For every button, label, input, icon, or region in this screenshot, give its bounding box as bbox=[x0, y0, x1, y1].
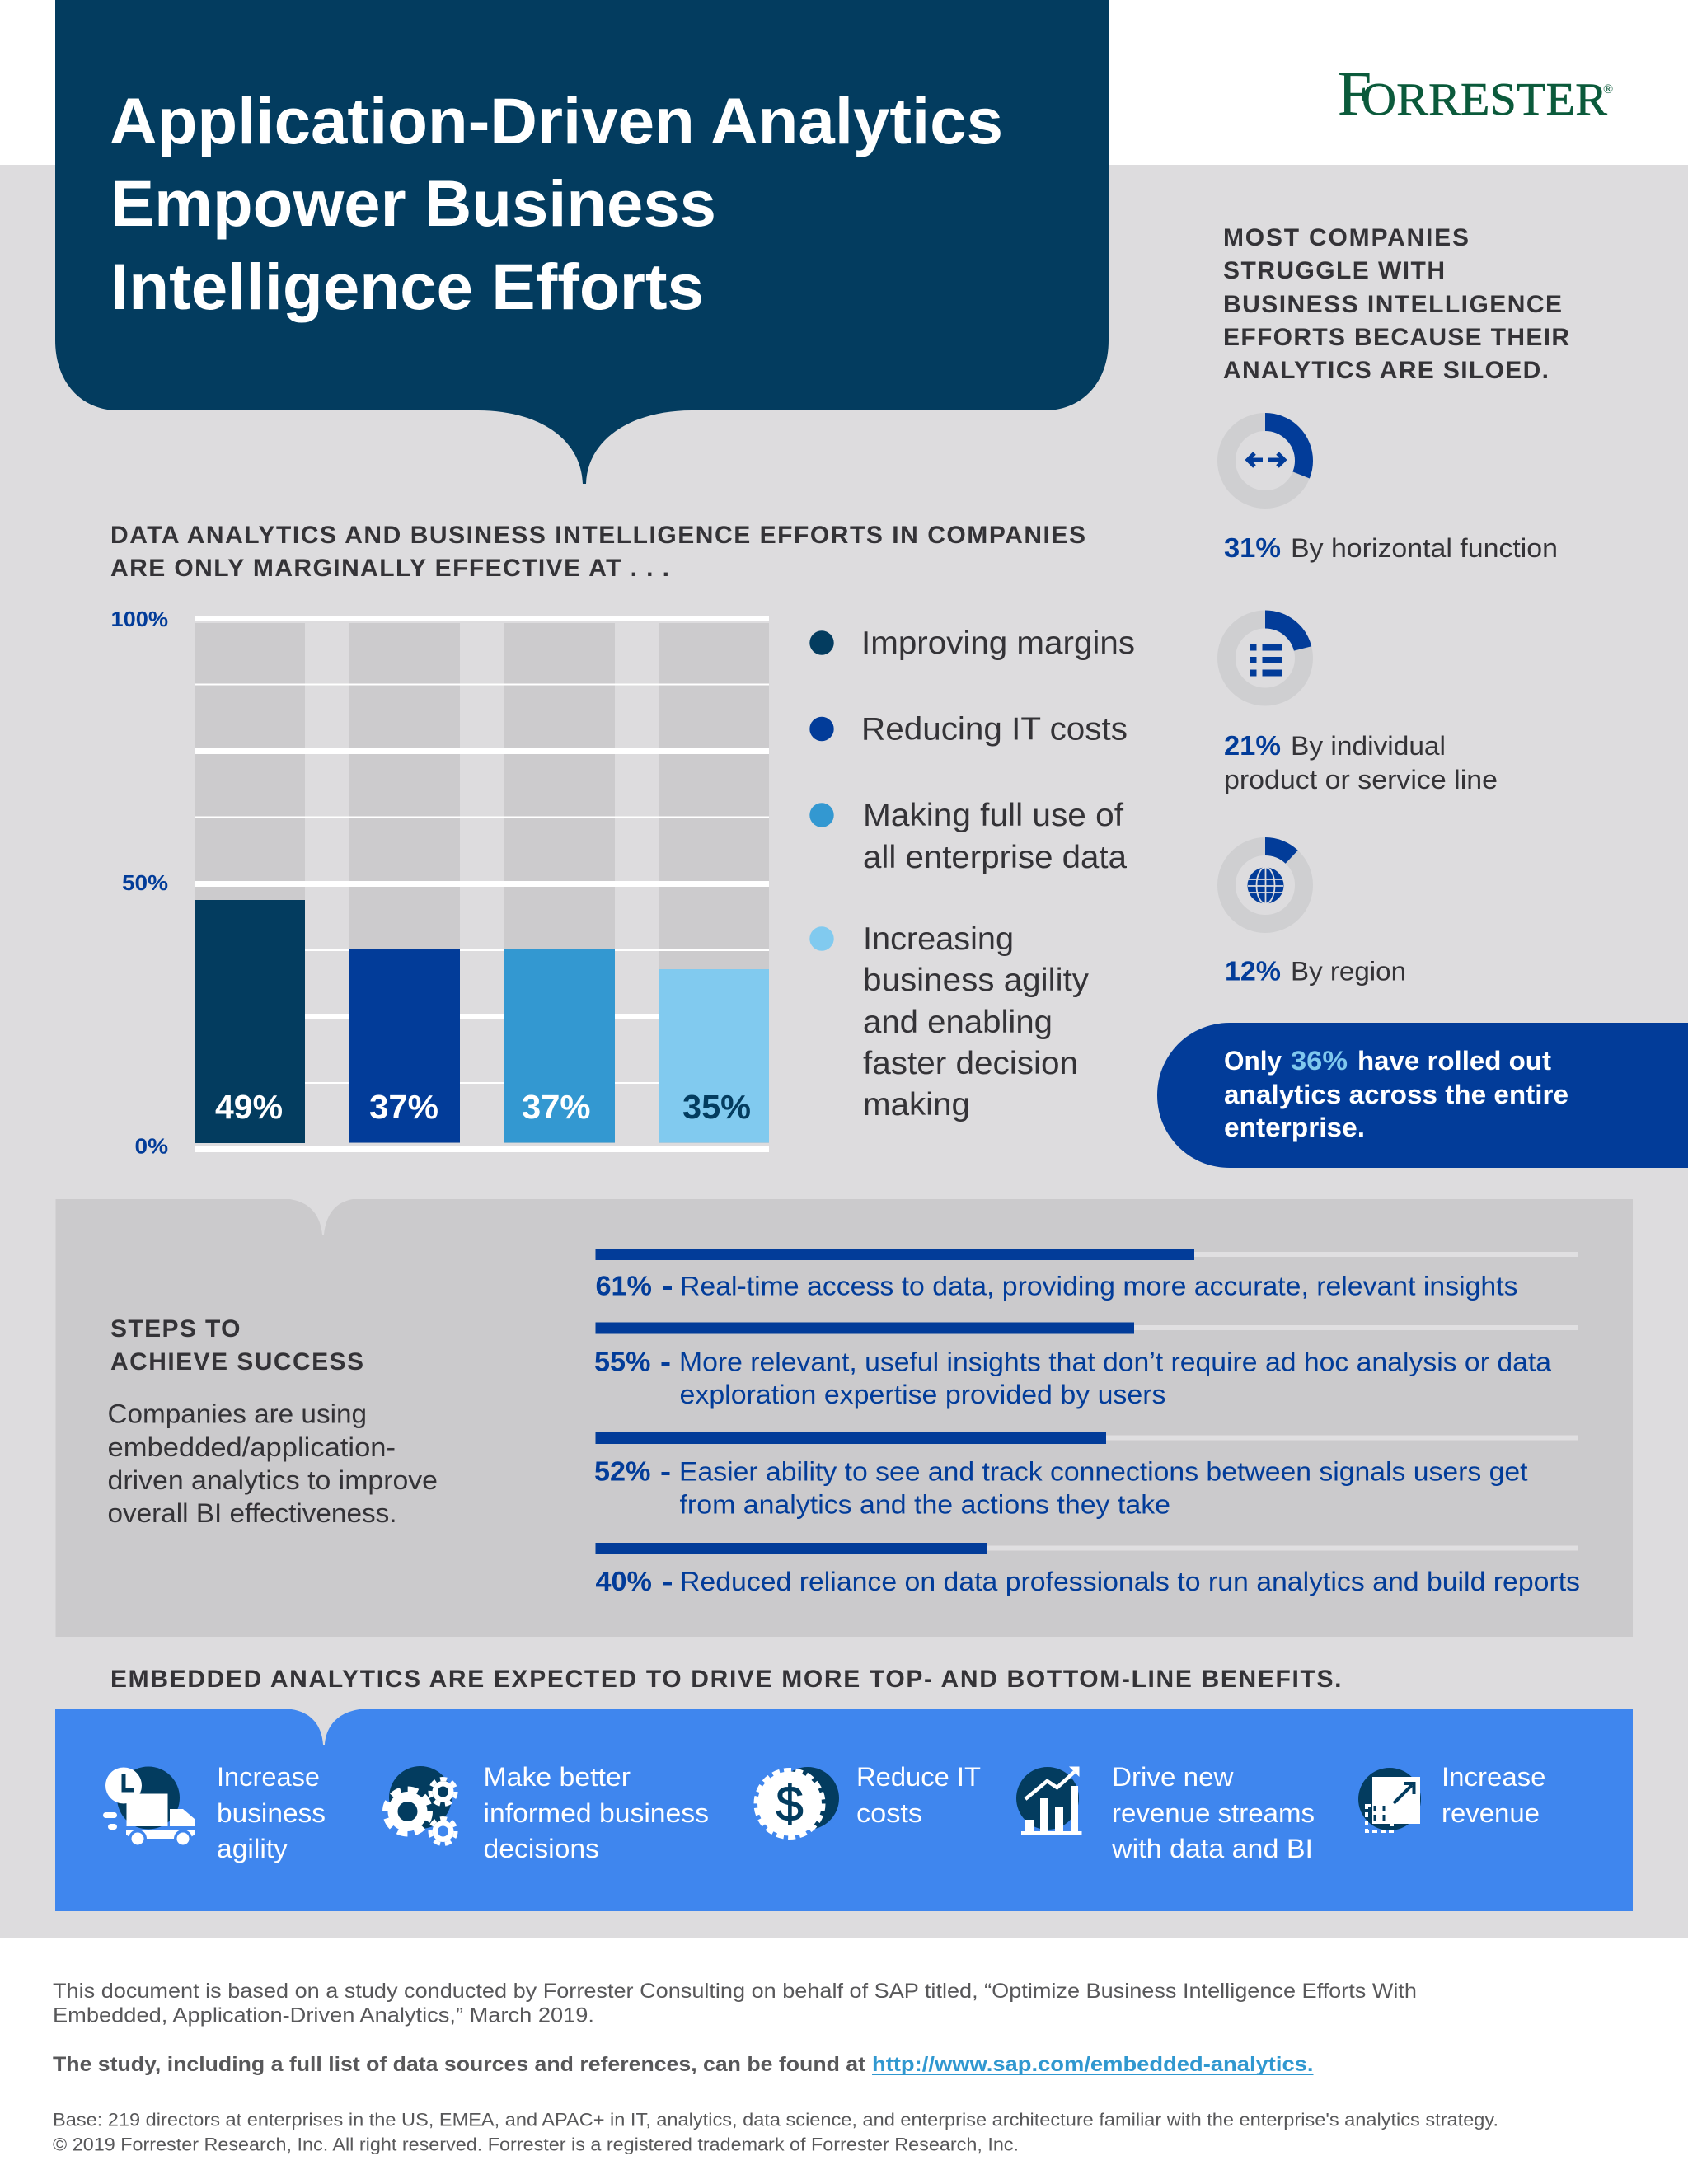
text: reduce IT costs: costs bbox=[856, 1798, 922, 1828]
title: Empower Business bbox=[110, 166, 716, 240]
text: increase business agility: Increase bbox=[217, 1762, 320, 1792]
chart legend bbox=[809, 626, 1135, 1122]
footer: base and copyright bbox=[53, 2110, 1498, 2154]
axis labels: 50% bbox=[122, 870, 168, 895]
text: make better decisions: informed business bbox=[483, 1798, 709, 1828]
footer: study source: This document is based on a study conducted by Forrester Consulting on behalf of SAP titled, “Optimize Business Intelligence Efforts With bbox=[53, 1980, 1417, 2003]
heading: steps to achieve success: ACHIEVE SUCCESS bbox=[110, 1348, 363, 1376]
text: increase business agility: business bbox=[217, 1798, 326, 1828]
callout: only 36% bbox=[1157, 1023, 1688, 1168]
stat bar: 52%: Easier ability to see and track connections between signals users get bbox=[679, 1457, 1528, 1487]
title: Intelligence Efforts bbox=[110, 250, 704, 323]
stat bar: 52%: 52% bbox=[594, 1455, 651, 1487]
text: steps description bbox=[107, 1399, 438, 1528]
stat bar: 55%: More relevant, useful insights that don’t require ad hoc analysis or data bbox=[679, 1347, 1551, 1376]
stat: 21% bbox=[1224, 730, 1498, 794]
stat: 12%: 12% bbox=[1225, 956, 1281, 986]
stat bar: 52% bbox=[594, 1432, 1578, 1520]
stat: 31%: 31% bbox=[1224, 532, 1281, 563]
heading: steps to achieve success: STEPS TO bbox=[110, 1315, 241, 1343]
axis labels bbox=[110, 607, 168, 1159]
stat bar: 61%: Real-time access to data, providing more accurate, relevant insights bbox=[680, 1271, 1518, 1301]
donut: 21% by product or service line bbox=[1226, 620, 1304, 697]
text: reduce IT costs: Reduce IT bbox=[856, 1762, 981, 1792]
stat bar: 61% bbox=[595, 1249, 1578, 1301]
bar: improving margins 49%: 49% bbox=[215, 1088, 283, 1126]
text: increase business agility bbox=[217, 1762, 326, 1863]
heading: siloed analytics: EFFORTS BECAUSE THEIR bbox=[1223, 324, 1569, 351]
bar: improving margins 49% bbox=[195, 900, 305, 1143]
text: drive new revenue: with data and BI bbox=[1111, 1834, 1313, 1863]
axis labels: 0% bbox=[135, 1134, 168, 1159]
donut: 12% by region bbox=[1226, 846, 1304, 924]
text: steps description: driven analytics to improve bbox=[107, 1465, 438, 1495]
bar: business agility 35%: 35% bbox=[682, 1088, 751, 1126]
footer: study source bbox=[53, 1980, 1417, 2027]
title banner bbox=[55, 0, 1109, 484]
stat: 21%: 21% bbox=[1224, 730, 1281, 761]
heading: siloed analytics: ANALYTICS ARE SILOED. bbox=[1223, 357, 1549, 384]
text: increase revenue bbox=[1442, 1762, 1546, 1828]
legend: business agility: making bbox=[863, 1087, 970, 1122]
legend: reducing IT costs: Reducing IT costs bbox=[861, 712, 1128, 747]
bar: enterprise data 37% bbox=[504, 949, 615, 1142]
stat bar: 52%: from analytics and the actions they take bbox=[679, 1490, 1170, 1520]
legend: full use of data bbox=[809, 798, 1127, 875]
icon: globe bbox=[1248, 867, 1284, 904]
stat bar: 55%: exploration expertise provided by users bbox=[679, 1380, 1165, 1409]
heading: embedded analytics benefits: EMBEDDED ANALYTICS ARE EXPECTED TO DRIVE MORE TOP- AND BOTTOM-LINE BENEFITS. bbox=[110, 1666, 1341, 1693]
heading: siloed analytics: STRUGGLE WITH bbox=[1223, 257, 1445, 284]
footer: study link bbox=[53, 2053, 1314, 2076]
text: drive new revenue: revenue streams bbox=[1112, 1798, 1315, 1828]
legend: business agility: Increasing bbox=[863, 921, 1014, 957]
footer: study link: The study, including a full list of data sources and references, can be found at bbox=[53, 2053, 866, 2076]
footer: base and copyright: Base: 219 directors at enterprises in the US, EMEA, and APAC+ in IT, analytics, data science, and enterprise architecture familiar with the enterprise's analytics strategy. bbox=[53, 2110, 1498, 2130]
text: steps description: Companies are using bbox=[107, 1399, 367, 1429]
legend: improving margins: Improving margins bbox=[861, 626, 1135, 661]
logo: Forrester bbox=[1338, 58, 1613, 129]
heading: steps to achieve success bbox=[110, 1315, 363, 1376]
heading: marginally effective bbox=[110, 522, 1085, 582]
bar tracks bbox=[195, 623, 769, 1143]
bar: reducing IT costs 37%: 37% bbox=[369, 1088, 438, 1126]
text: drive new revenue bbox=[1111, 1762, 1315, 1863]
legend: business agility: and enabling bbox=[863, 1005, 1053, 1040]
legend: full use of data: Making full use of bbox=[863, 798, 1123, 833]
icon: gears bbox=[386, 1766, 456, 1844]
title bbox=[110, 84, 1003, 323]
stat bar: 55% bbox=[594, 1322, 1578, 1409]
heading: siloed analytics: BUSINESS INTELLIGENCE bbox=[1223, 291, 1562, 318]
text: reduce IT costs bbox=[856, 1762, 981, 1828]
text: make better decisions: decisions bbox=[483, 1834, 599, 1863]
stat: 12% bbox=[1225, 956, 1406, 986]
stat: 21%: product or service line bbox=[1224, 765, 1498, 794]
stat: 31%: By horizontal function bbox=[1291, 533, 1558, 563]
heading: marginally effective: DATA ANALYTICS AND BUSINESS INTELLIGENCE EFFORTS IN COMPANIES bbox=[110, 522, 1085, 549]
logo: Forrester: F bbox=[1338, 58, 1372, 129]
callout: only 36%: enterprise. bbox=[1224, 1113, 1365, 1142]
icon: arrows bbox=[1248, 453, 1284, 466]
bar: reducing IT costs 37% bbox=[349, 949, 460, 1142]
text: increase revenue: Increase bbox=[1442, 1762, 1546, 1792]
icon: dollar badge: $ bbox=[776, 1776, 804, 1831]
donut: 31% by horizontal function bbox=[1226, 422, 1304, 499]
heading: siloed analytics: MOST COMPANIES bbox=[1223, 224, 1469, 251]
text: steps description: overall BI effectiveness. bbox=[107, 1498, 397, 1528]
icon: truck and clock bbox=[103, 1767, 195, 1848]
text: steps description: embedded/application- bbox=[107, 1432, 396, 1462]
text: increase business agility: agility bbox=[217, 1834, 288, 1863]
callout: only 36%: 36% bbox=[1291, 1046, 1348, 1076]
stat: 12%: By region bbox=[1291, 956, 1406, 986]
footer: base and copyright: © 2019 Forrester Research, Inc. All right reserved. Forrester is a registered trademark of Forrester Research, Inc. bbox=[53, 2135, 1019, 2154]
stat bar: 55%: 55% bbox=[594, 1347, 651, 1376]
bar: enterprise data 37%: 37% bbox=[522, 1088, 590, 1126]
footer: study link: http://www.sap.com/embedded-analytics. bbox=[872, 2053, 1314, 2076]
text: make better decisions bbox=[483, 1762, 709, 1863]
icon: scaling square bbox=[1358, 1768, 1421, 1831]
footer: study source: Embedded, Application-Driven Analytics,” March 2019. bbox=[53, 2004, 594, 2027]
legend: full use of data: all enterprise data bbox=[863, 840, 1127, 875]
legend: business agility bbox=[809, 921, 1090, 1122]
icon: list bbox=[1250, 644, 1282, 676]
heading: siloed analytics bbox=[1223, 224, 1569, 384]
logo: Forrester: ORRESTER bbox=[1362, 74, 1608, 125]
panel: benefits bbox=[55, 1708, 1633, 1911]
text: make better decisions: Make better bbox=[483, 1762, 631, 1792]
icon: growth chart bbox=[1016, 1767, 1081, 1835]
text: increase revenue: revenue bbox=[1442, 1798, 1540, 1828]
stat bar: 40%: Reduced reliance on data professionals to run analytics and build reports bbox=[680, 1567, 1580, 1596]
legend: business agility: faster decision bbox=[863, 1046, 1078, 1081]
legend: business agility: business agility bbox=[863, 963, 1090, 998]
bar chart bbox=[110, 607, 769, 1159]
heading: marginally effective: ARE ONLY MARGINALLY EFFECTIVE AT . . . bbox=[110, 555, 669, 582]
icon: dollar badge bbox=[756, 1767, 839, 1838]
axis labels: 100% bbox=[110, 607, 168, 631]
stat bar: 61%: 61% bbox=[595, 1271, 652, 1301]
stat bar: 40%: 40% bbox=[595, 1566, 652, 1596]
callout: only 36%: have rolled out bbox=[1357, 1046, 1551, 1076]
text: drive new revenue: Drive new bbox=[1112, 1762, 1234, 1792]
title: Application-Driven Analytics bbox=[110, 84, 1003, 157]
stat bar: 40% bbox=[595, 1543, 1580, 1596]
panel: steps to achieve success bbox=[56, 1198, 1633, 1637]
logo: Forrester: ® bbox=[1603, 82, 1613, 96]
stat: 21%: By individual bbox=[1291, 731, 1446, 761]
callout: only 36%: analytics across the entire bbox=[1224, 1080, 1568, 1109]
bar: business agility 35% bbox=[659, 969, 769, 1142]
callout: only 36%: Only bbox=[1224, 1046, 1282, 1076]
